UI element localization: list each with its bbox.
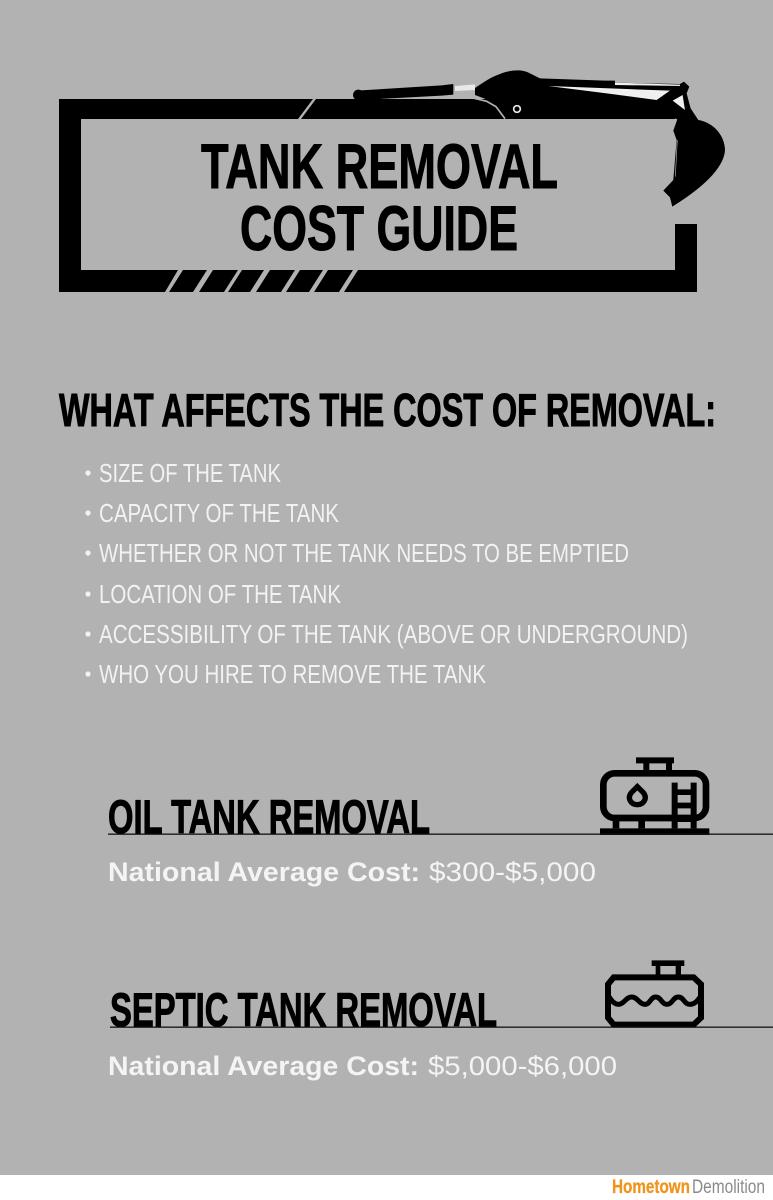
icon: septic tank <box>608 960 701 1025</box>
section: oil tank removal: OIL TANK REMOVAL <box>108 790 430 843</box>
title: TANK REMOVAL <box>201 132 558 202</box>
icon: excavator arm <box>340 70 725 207</box>
section: septic tank removal <box>108 983 773 1081</box>
title <box>201 132 558 264</box>
section: oil tank removal: $300-$5,000 <box>429 857 596 887</box>
list: cost factors: LOCATION OF THE TANK <box>99 579 342 609</box>
list: cost factors: CAPACITY OF THE TANK <box>99 498 340 528</box>
footer logo: Hometown <box>612 1177 690 1198</box>
list: cost factors: WHO YOU HIRE TO REMOVE THE TANK <box>99 659 487 689</box>
section: oil tank removal <box>108 790 773 887</box>
section: septic tank removal: National Average Cost: <box>108 1051 419 1081</box>
list: cost factors: WHETHER OR NOT THE TANK NEEDS TO BE EMPTIED <box>99 538 629 568</box>
footer logo <box>612 1177 765 1198</box>
title: COST GUIDE <box>240 194 518 264</box>
footer band <box>0 1175 773 1200</box>
section: septic tank removal: SEPTIC TANK REMOVAL <box>110 983 497 1036</box>
icon: oil tank <box>600 757 709 835</box>
list: cost factors <box>85 458 688 689</box>
section: septic tank removal: $5,000-$6,000 <box>428 1051 617 1081</box>
title frame <box>59 99 697 292</box>
list: cost factors: SIZE OF THE TANK <box>99 458 282 488</box>
section: oil tank removal: National Average Cost: <box>108 857 420 887</box>
